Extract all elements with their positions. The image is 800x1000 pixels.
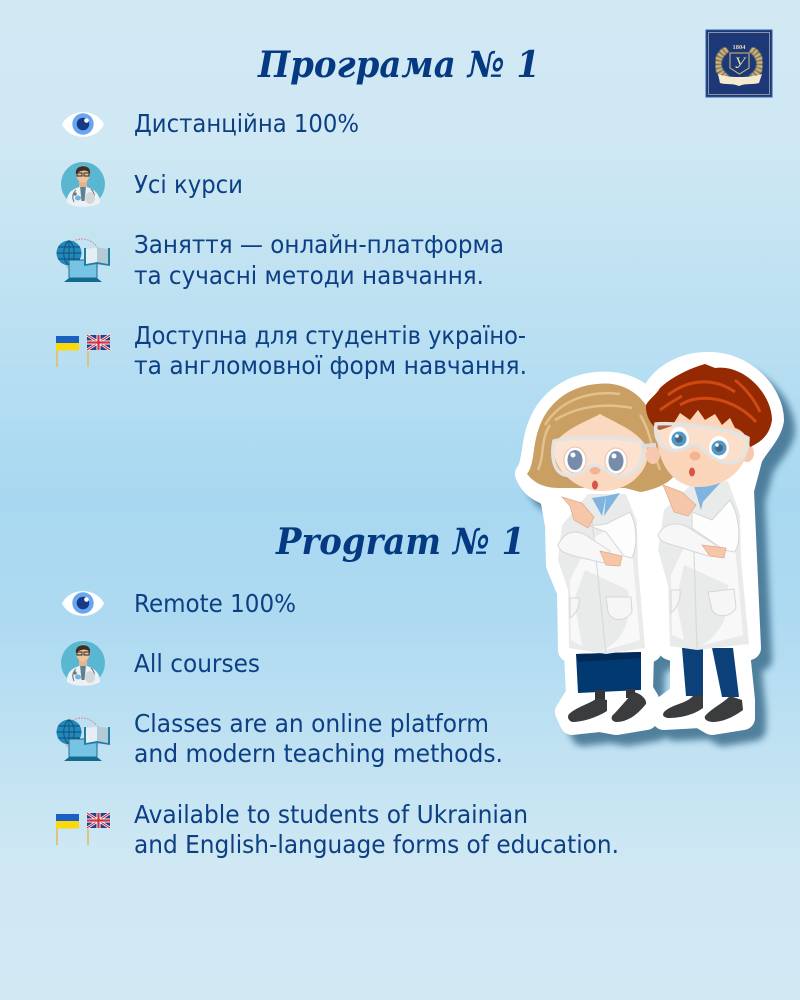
heading: Ukrainian title: Програма № 1 — [257, 44, 540, 86]
text: classes UA: Заняття — онлайн-платформа — [134, 230, 504, 259]
text: remote UA: Дистанційна 100% — [134, 109, 359, 138]
icon: flags (EN) — [56, 813, 110, 845]
text: courses EN: All courses — [134, 649, 260, 678]
icon: eye (EN) — [62, 591, 104, 616]
text: courses UA: Усі курси — [134, 170, 243, 199]
text: classes EN: and modern teaching methods. — [134, 739, 503, 768]
text: availability UA — [134, 321, 527, 380]
logo: university emblem — [706, 30, 772, 97]
illustration: two young scientists sticker — [527, 364, 783, 734]
text: availability UA: та англомовної форм навчання. — [134, 351, 527, 380]
text: remote EN: Remote 100% — [134, 589, 296, 618]
text: availability EN: and English-language forms of education. — [134, 830, 619, 859]
icon: globe laptop book (UA) — [56, 239, 110, 282]
character: girl — [527, 383, 674, 722]
icon: doctor (UA) — [61, 162, 105, 207]
logo: university emblem: У — [734, 55, 747, 72]
icon: globe laptop book (EN) — [56, 718, 110, 761]
icon: doctor (EN) — [61, 641, 105, 686]
icon: flags (UA) — [56, 335, 110, 367]
text: availability EN: Available to students of Ukrainian — [134, 800, 528, 829]
text: availability EN — [134, 800, 619, 859]
icon: eye (UA) — [62, 112, 104, 137]
text: classes EN: Classes are an online platform — [134, 709, 489, 738]
text: classes UA — [134, 230, 504, 290]
character: boy — [646, 364, 772, 722]
text: availability UA: Доступна для студентів україно- — [134, 321, 526, 350]
text: classes EN — [134, 709, 503, 768]
text: classes UA: та сучасні методи навчання. — [134, 261, 484, 290]
heading: English title: Program № 1 — [275, 521, 525, 563]
logo: university emblem: 1804 — [732, 44, 746, 51]
